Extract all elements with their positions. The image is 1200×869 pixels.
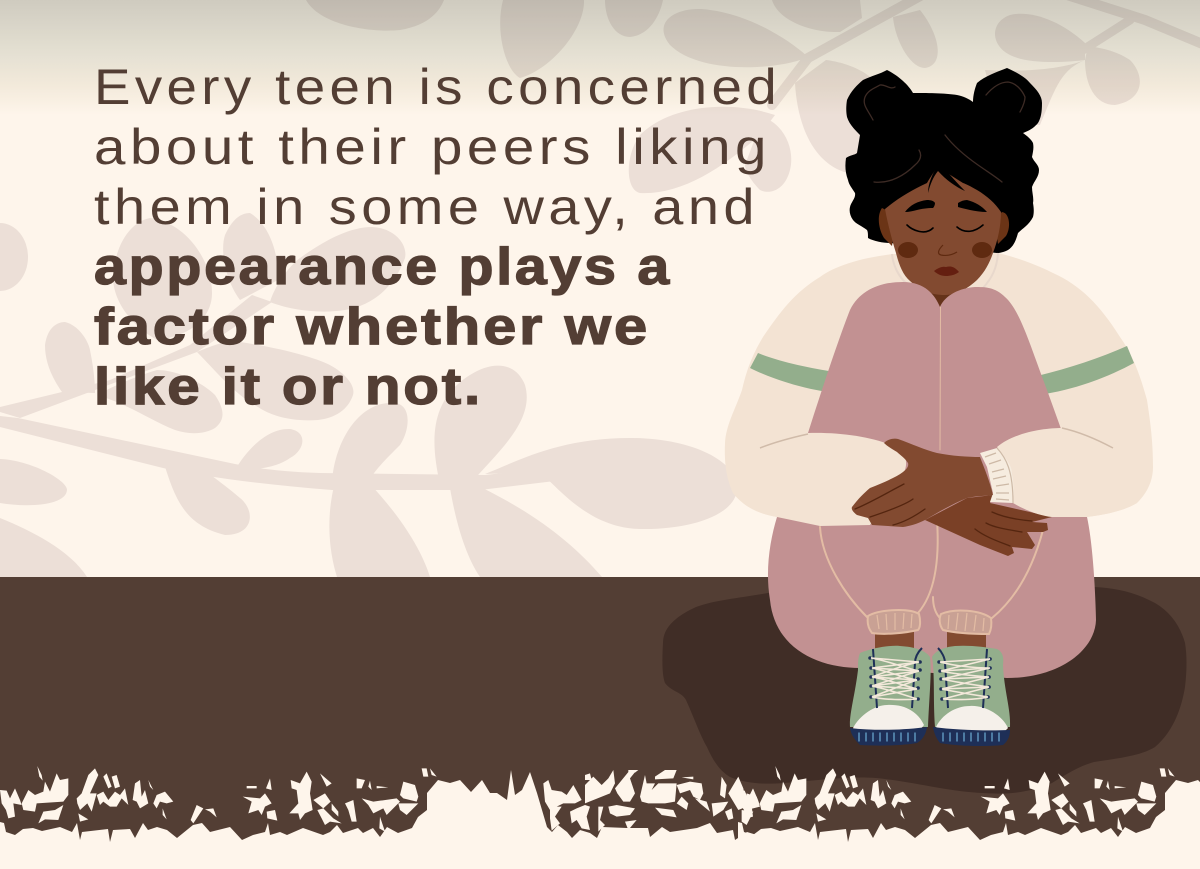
torn fragments first repeat <box>0 766 760 869</box>
closed eyes <box>907 225 983 232</box>
hair <box>845 68 1042 253</box>
toe cap <box>936 706 1008 731</box>
eyelets <box>939 659 990 699</box>
hair bangs on forehead <box>928 166 965 193</box>
cuff ribs <box>985 448 1013 503</box>
sleeve stripe right <box>1037 346 1134 394</box>
sleeve crease right <box>1062 428 1113 448</box>
pants seams <box>820 307 1043 618</box>
bold text lines <box>94 238 672 416</box>
regular text lines: about their peers liking <box>94 119 771 175</box>
headline text <box>94 59 781 416</box>
regular text lines: them in some way, and <box>94 179 759 235</box>
face <box>885 167 1001 295</box>
laces <box>871 658 919 700</box>
pant cuff ribs <box>877 613 984 631</box>
hair strands <box>864 82 1025 182</box>
eyelets <box>870 658 920 699</box>
regular text lines: Every teen is concerned <box>94 59 781 115</box>
sole <box>933 727 1010 746</box>
torn paper edge <box>0 766 1200 869</box>
lower hand <box>925 495 1052 556</box>
sad girl illustration <box>725 68 1153 746</box>
toe cap <box>853 705 924 731</box>
eyebrows <box>905 200 987 212</box>
shoe stripes <box>938 648 987 708</box>
sole ribs <box>942 732 1003 742</box>
pants <box>768 282 1096 678</box>
bold text lines: appearance plays a <box>94 238 672 296</box>
left sleeve <box>733 433 906 526</box>
sweater torso <box>725 253 1153 526</box>
mouth <box>934 267 959 276</box>
collar lines <box>892 253 998 288</box>
sleeve stripe left <box>750 353 835 392</box>
shoe body <box>932 646 1010 727</box>
cheeks <box>898 242 992 258</box>
shoe stripes <box>873 648 922 708</box>
bold text lines: like it or not. <box>94 358 483 416</box>
lower hand finger lines <box>975 512 1032 546</box>
sleeve crease left <box>760 434 808 448</box>
top branch stems <box>772 0 1200 105</box>
upper hand <box>852 439 993 527</box>
ears <box>879 208 1009 246</box>
top leaves <box>306 0 1140 193</box>
bold text lines: factor whether we <box>94 298 650 356</box>
knit cuff <box>980 448 1014 503</box>
shoe body <box>850 646 931 727</box>
torn fragments second repeat <box>738 766 1200 869</box>
right shoe <box>932 646 1010 746</box>
regular text lines <box>94 59 781 235</box>
decorative leaf branches <box>0 0 1200 577</box>
dark ground band <box>0 577 1200 842</box>
neck shadow <box>905 272 980 310</box>
laces <box>940 659 990 700</box>
right sleeve <box>997 428 1140 517</box>
sole <box>850 727 927 746</box>
ankles <box>875 630 986 650</box>
sole ribs <box>858 732 918 742</box>
lower left leaves <box>0 213 737 577</box>
nose <box>939 245 957 255</box>
pant cuffs <box>868 610 991 634</box>
top shadow gradient <box>0 0 1200 115</box>
left shoe <box>850 646 931 746</box>
upper hand finger lines <box>855 484 925 525</box>
left branch stems <box>0 295 580 490</box>
dark puddle shadow <box>662 587 1186 794</box>
